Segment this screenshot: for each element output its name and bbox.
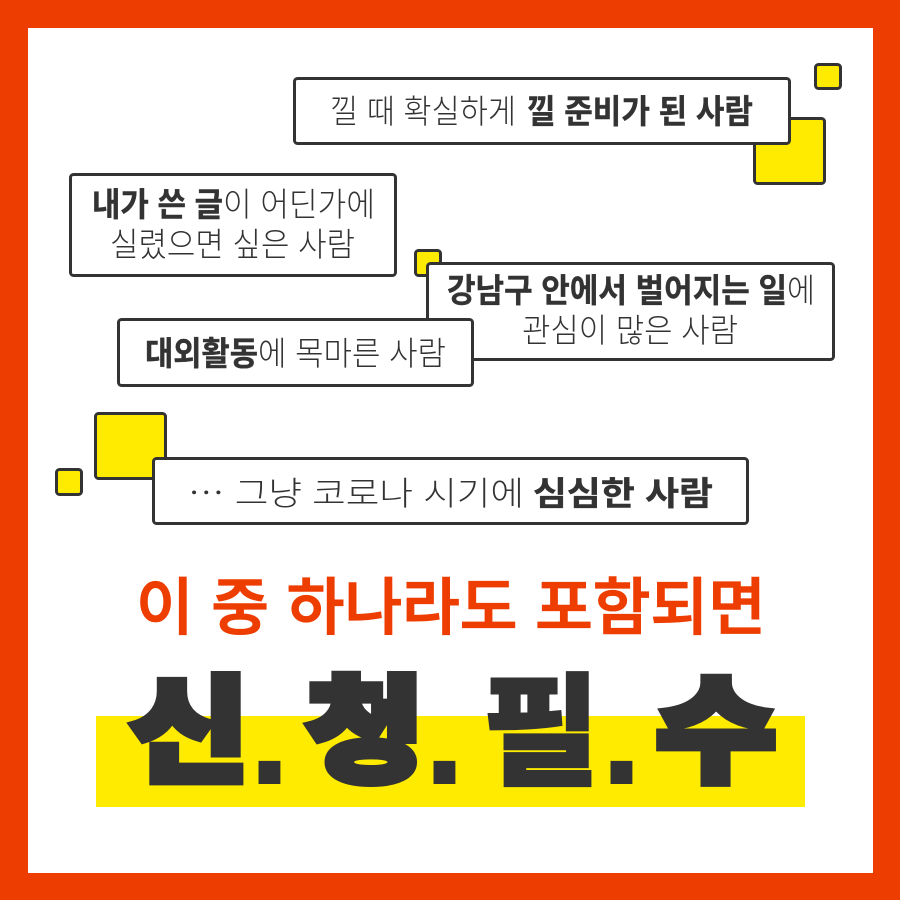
callout: bored statement: 심심한 사람 bbox=[533, 467, 713, 515]
main heading: 신청필수 bbox=[130, 634, 776, 817]
callout: activities statement bbox=[118, 320, 472, 386]
icon: large yellow square top right bbox=[754, 118, 824, 184]
icon: small yellow square left bbox=[56, 470, 82, 494]
callout: activities statement: 대외활동 bbox=[145, 327, 258, 375]
main heading: 신청필수: 청 bbox=[306, 640, 424, 806]
callout: Gangnam statement: 관심이 많은 사람 bbox=[522, 304, 738, 352]
main heading: 신청필수: 수 bbox=[656, 640, 776, 806]
callout: writing statement: 이 어딘가에 bbox=[223, 178, 375, 226]
callout: top statement: 낄 때 확실하게 bbox=[330, 85, 516, 133]
callout: Gangnam statement: 강남구 안에서 벌어지는 일 bbox=[447, 264, 787, 312]
callout: writing statement: 실렸으면 싶은 사람 bbox=[110, 218, 355, 266]
callout: Gangnam statement bbox=[428, 264, 834, 360]
icon: small yellow square middle bbox=[416, 250, 440, 276]
main heading: 신청필수: 신 bbox=[130, 640, 249, 806]
main heading: 신청필수: 필 bbox=[482, 634, 600, 811]
callout: top statement: 낄 준비가 된 사람 bbox=[527, 85, 753, 133]
callout: Gangnam statement: 에 bbox=[787, 264, 815, 312]
main heading: 신청필수: . bbox=[423, 644, 466, 817]
callout: writing statement bbox=[70, 174, 396, 276]
callout: bored statement: … 그냥 코로나 시기에 bbox=[188, 467, 524, 515]
icon: small yellow square top right bbox=[816, 64, 840, 88]
subheading: 이 중 하나라도 포함되면 bbox=[136, 557, 766, 647]
main heading: 신청필수: . bbox=[600, 644, 643, 817]
callout: top statement bbox=[294, 78, 790, 144]
icon: large yellow square left bbox=[96, 414, 166, 478]
callout: writing statement: 내가 쓴 글 bbox=[92, 178, 223, 226]
callout: activities statement: 에 목마른 사람 bbox=[258, 327, 446, 375]
callout: bored statement bbox=[154, 458, 748, 524]
highlight band bbox=[96, 716, 805, 807]
main heading: 신청필수: . bbox=[248, 644, 291, 817]
